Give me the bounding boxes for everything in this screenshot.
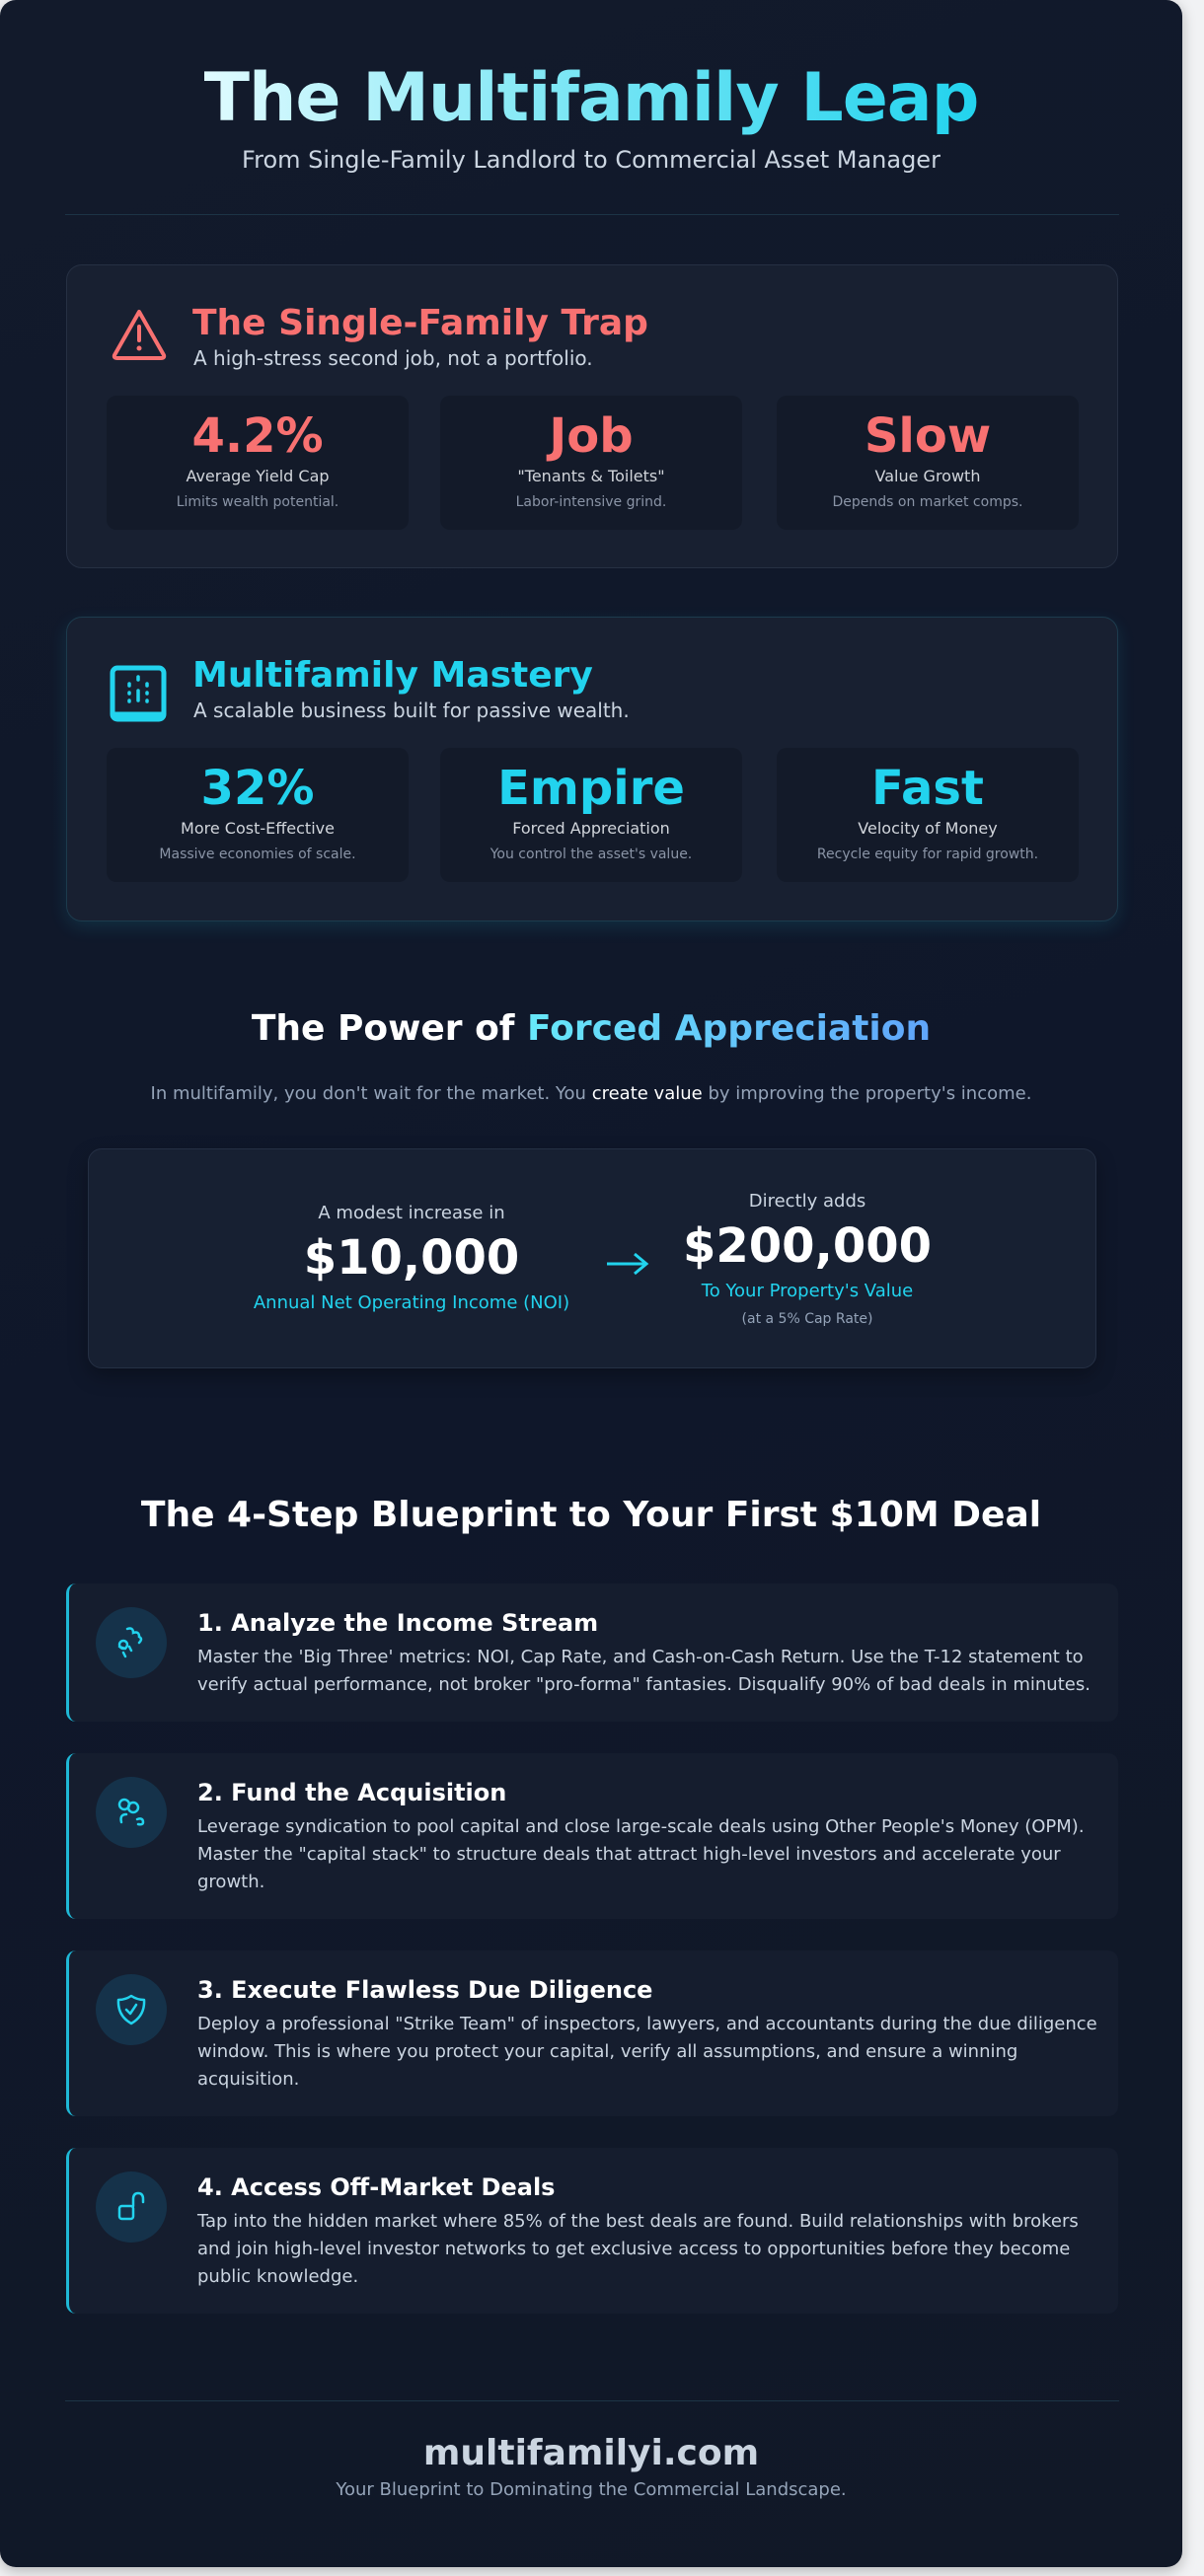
step 4 [66, 2148, 1118, 2314]
stat: fast: Velocity of Money [858, 819, 998, 838]
panel: multifamily mastery [66, 617, 1118, 921]
right: value: Directly adds [749, 1191, 865, 1212]
heading: 4-step blueprint: The 4-Step Blueprint to Your First $10M Deal [141, 1495, 1041, 1535]
right: value: (at a 5% Cap Rate) [742, 1311, 872, 1327]
stat: fast [777, 748, 1079, 882]
step 3: Deploy a professional "Strike Team" of inspectors, lawyers, and accountants during the due diligence window. This is where you protect your capital, verify all assumptions, and ensure a winning acquisition. [197, 2014, 1097, 2090]
heading: Multifamily Mastery [192, 655, 593, 696]
step 3: 3. Execute Flawless Due Diligence [197, 1976, 652, 2004]
subheading: A high-stress second job, not a portfolio. [193, 346, 593, 370]
footer: tagline: Your Blueprint to Dominating the Commercial Landscape. [336, 2479, 847, 2500]
stat: fast: Recycle equity for rapid growth. [817, 846, 1038, 862]
icon: people [96, 1777, 167, 1848]
right: value: To Your Property's Value [702, 1281, 913, 1301]
left: NOI: A modest increase in [318, 1203, 505, 1223]
heading: The Single-Family Trap [192, 303, 648, 343]
stat: empire: Empire [497, 761, 685, 816]
stat: yield cap [107, 396, 409, 530]
step 4: Tap into the hidden market where 85% of the best deals are found. Build relationships with brokers and join high-level investor networks to get exclusive access to opportunities before they become public knowledge. [197, 2211, 1079, 2287]
left: NOI: Annual Net Operating Income (NOI) [254, 1292, 569, 1313]
right: value [683, 1191, 932, 1327]
left: NOI: $10,000 [304, 1230, 519, 1286]
arrow [607, 1253, 649, 1275]
stat: job: Job [549, 408, 634, 464]
step 4: 4. Access Off-Market Deals [197, 2173, 555, 2201]
step 1 [66, 1583, 1118, 1722]
stat: 32%: More Cost-Effective [181, 819, 335, 838]
stat: slow: Slow [865, 408, 991, 464]
step 2: 2. Fund the Acquisition [197, 1779, 506, 1806]
stat: yield cap: 4.2% [191, 408, 324, 464]
right: value: $200,000 [683, 1218, 932, 1274]
footer: site: multifamilyi.com [423, 2433, 759, 2473]
stat: 32%: 32% [201, 761, 314, 816]
icon: warning triangle [113, 310, 166, 360]
subheading: A scalable business built for passive wealth. [193, 699, 630, 722]
stat: empire: You control the asset's value. [490, 846, 692, 862]
stat: slow [777, 396, 1079, 530]
callout: NOI to value [88, 1148, 1096, 1368]
stat: yield cap: Average Yield Cap [186, 467, 330, 485]
title: The Multifamily Leap [204, 59, 978, 137]
stat: empire: Forced Appreciation [512, 819, 670, 838]
step 1: Master the 'Big Three' metrics: NOI, Cap Rate, and Cash-on-Cash Return. Use the T-12 statement to verify actual performance, not broker "pro-forma" fantasies. Disqualify 90% of bad deals in minutes. [197, 1647, 1091, 1695]
stat: empire [440, 748, 742, 882]
stat: job [440, 396, 742, 530]
step 2: Leverage syndication to pool capital and close large-scale deals using Other People's Money (OPM). Master the "capital stack" to structure deals that attract high-level investors and accelerate your growth. [197, 1816, 1085, 1892]
step 3 [66, 1950, 1118, 2116]
stat: slow: Value Growth [875, 467, 980, 485]
icon: shield [96, 1974, 167, 2045]
stat: job: "Tenants & Toilets" [517, 467, 665, 485]
subtitle: From Single-Family Landlord to Commercial Asset Manager [242, 146, 941, 174]
paragraph: In multifamily, you don't wait for the market. You create value by improving the property's income. [151, 1083, 1031, 1104]
heading: forced appreciation: The Power of Forced Appreciation [252, 1008, 931, 1049]
icon: building [111, 665, 166, 722]
stat: yield cap: Limits wealth potential. [177, 494, 339, 510]
stat: fast: Fast [871, 761, 984, 816]
icon: unlock [96, 2171, 167, 2243]
stat: slow: Depends on market comps. [833, 494, 1022, 510]
step 1: 1. Analyze the Income Stream [197, 1609, 598, 1637]
panel: single-family trap [66, 264, 1118, 568]
stat: 32%: Massive economies of scale. [159, 846, 356, 862]
stat: job: Labor-intensive grind. [516, 494, 666, 510]
stat: 32% [107, 748, 409, 882]
left: NOI [254, 1203, 569, 1313]
icon: chart [96, 1607, 167, 1678]
step 2 [66, 1753, 1118, 1919]
